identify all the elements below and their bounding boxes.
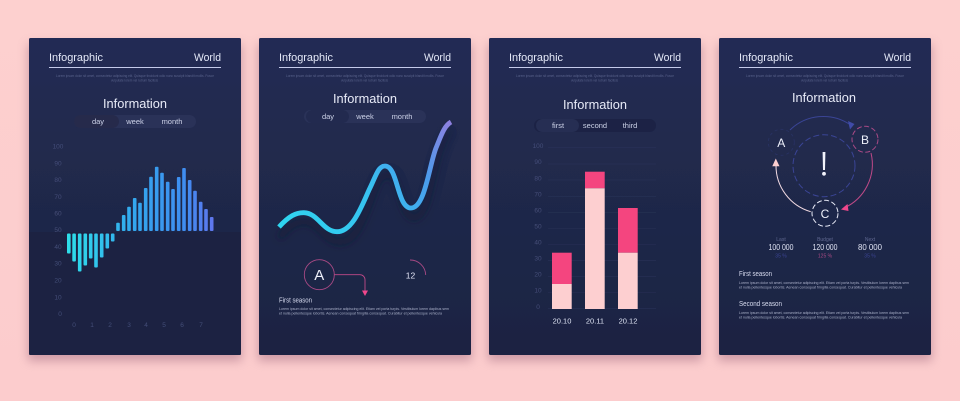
exclamation mark <box>822 152 826 176</box>
y axis: 70 <box>534 192 542 198</box>
y axis: 40 <box>54 244 62 251</box>
header: Infographic <box>279 52 333 64</box>
intro text: Lorem ipsum dolor sit amet, consectetur adipiscing elit. Quisque tincidunt odio nunc suscipit blandit mollis. Fusce <box>516 74 674 78</box>
cycle diagram <box>768 116 878 226</box>
first season text <box>739 271 909 290</box>
bar labels: 20.12 <box>619 316 637 326</box>
first season text: et nulla pellentesque lobortis. Aenean consequat fringilla consequat. Curabitur et pellentesque vehicula <box>739 286 902 290</box>
y axis: 20 <box>534 272 542 278</box>
header: Infographic <box>509 52 563 64</box>
callout A with arrow: A <box>314 267 324 284</box>
tabs: week <box>355 112 374 121</box>
y axis: 90 <box>54 160 62 168</box>
first season text: Lorem ipsum dolor sit amet, consectetur adipiscing elit. Etiam vel porta turpis. Vestibulum lorem dapibus sem <box>279 307 449 311</box>
intro text: vulputate lorem vel rutrum facilisis <box>111 78 158 82</box>
tabs: third <box>623 121 637 130</box>
panel 1: bar wave chart <box>29 38 241 355</box>
header: World <box>884 52 911 64</box>
header <box>509 52 681 68</box>
y axis: 10 <box>534 288 542 294</box>
first season text: First season <box>279 298 312 304</box>
tabs: day <box>92 117 104 126</box>
first season text: et nulla pellentesque lobortis. Aenean consequat fringilla consequat. Curabitur et pellentesque vehicula <box>279 312 442 316</box>
second season text <box>739 301 909 320</box>
y axis: 50 <box>54 227 62 234</box>
arrow A to B <box>790 116 854 130</box>
diverging bars <box>67 167 214 272</box>
x axis: 1 <box>90 322 94 329</box>
y axis: 0 <box>58 311 62 318</box>
y axis: 80 <box>534 176 542 182</box>
first season text: First season <box>739 271 772 278</box>
intro text: Lorem ipsum dolor sit amet, consectetur adipiscing elit. Quisque tincidunt odio nunc suscipit blandit mollis. Fusce <box>56 74 214 78</box>
grid lines <box>548 148 656 309</box>
y axis: 100 <box>53 144 64 150</box>
header <box>739 52 911 68</box>
x axis: 2 <box>108 322 112 329</box>
x axis: 5 <box>162 322 166 329</box>
bar 20.11 <box>585 172 605 309</box>
panel shadows <box>28 44 932 361</box>
intro text: vulputate lorem vel rutrum facilisis <box>801 78 848 82</box>
stat next: 35 % <box>864 254 876 260</box>
header: Infographic <box>49 52 103 64</box>
y axis: 30 <box>54 260 62 268</box>
intro text <box>56 74 214 82</box>
heading: Information <box>792 90 856 105</box>
x axis: 4 <box>144 322 148 329</box>
x axis <box>72 322 203 329</box>
tabs <box>534 119 656 132</box>
stat last <box>768 237 794 260</box>
B node: B <box>861 133 869 147</box>
header <box>49 52 221 68</box>
header: World <box>194 52 221 64</box>
arrow C to A <box>772 158 811 212</box>
first season text <box>279 298 449 316</box>
y axis: 100 <box>533 143 544 150</box>
stat last: Last <box>776 237 786 243</box>
x axis: 3 <box>127 322 131 329</box>
intro text: Lorem ipsum dolor sit amet, consectetur adipiscing elit. Quisque tincidunt odio nunc suscipit blandit mollis. Fusce <box>286 74 444 78</box>
tabs: month <box>392 112 412 121</box>
y axis: 20 <box>54 278 62 284</box>
stat last: 100 000 <box>768 243 794 252</box>
bar 20.10 <box>552 253 572 309</box>
y axis: 70 <box>54 194 62 201</box>
y axis: 60 <box>534 208 542 214</box>
x axis: 0 <box>72 322 76 329</box>
second season text: Second season <box>739 301 782 308</box>
callout A with arrow <box>304 260 368 296</box>
panel 3: stacked bar chart <box>489 38 701 355</box>
second season text: Lorem ipsum dolor sit amet, consectetur adipiscing elit. Etiam vel porta turpis. Vestibulum lorem dapibus sem <box>739 311 909 315</box>
y axis: 80 <box>54 177 62 184</box>
curve shadow <box>279 130 451 242</box>
arrow B to C <box>841 153 872 211</box>
intro text <box>286 74 444 82</box>
heading: Information <box>333 91 397 106</box>
bar labels <box>553 316 637 326</box>
A node: A <box>777 136 785 150</box>
x axis: 6 <box>180 322 184 329</box>
center dashed ring <box>793 135 855 197</box>
panel 2: curve chart <box>259 38 471 355</box>
tabs: first <box>552 121 565 130</box>
intro text: vulputate lorem vel rutrum facilisis <box>341 78 388 82</box>
tabs <box>74 115 196 128</box>
stat budget <box>812 237 838 260</box>
header: Infographic <box>739 52 793 64</box>
stat last: 35 % <box>775 254 787 260</box>
stats <box>768 237 883 260</box>
y axis: 10 <box>54 294 62 302</box>
bar labels: 20.10 <box>553 316 571 326</box>
first season text: Lorem ipsum dolor sit amet, consectetur adipiscing elit. Etiam vel porta turpis. Vestibulum lorem dapibus sem <box>739 281 909 285</box>
y axis <box>533 143 544 311</box>
tabs <box>304 110 426 123</box>
intro text <box>516 74 674 82</box>
dial 12 <box>406 260 426 280</box>
stat next <box>858 237 883 260</box>
panel 4: cycle diagram <box>719 38 931 355</box>
intro text <box>746 74 904 82</box>
intro text: Lorem ipsum dolor sit amet, consectetur adipiscing elit. Quisque tincidunt odio nunc suscipit blandit mollis. Fusce <box>746 74 904 78</box>
stat next: Next <box>865 237 876 243</box>
header <box>279 52 451 68</box>
header: World <box>424 52 451 64</box>
stat budget: 125 % <box>818 254 833 260</box>
y axis: 90 <box>534 159 542 166</box>
y axis: 30 <box>534 256 542 262</box>
header: World <box>654 52 681 64</box>
y axis: 40 <box>534 240 542 246</box>
tabs: week <box>125 117 144 126</box>
bar 20.12 <box>618 208 638 309</box>
tabs: day <box>322 112 334 121</box>
heading: Information <box>563 97 627 112</box>
bar labels: 20.11 <box>586 316 604 326</box>
dial 12: 12 <box>406 270 415 280</box>
heading: Information <box>103 96 167 111</box>
stat next: 80 000 <box>858 243 883 252</box>
stat budget: 120 000 <box>812 243 838 252</box>
y axis: 50 <box>534 224 542 230</box>
y axis: 0 <box>536 304 540 311</box>
x axis: 7 <box>199 322 203 329</box>
curve line <box>279 122 451 232</box>
second season text: et nulla pellentesque lobortis. Aenean consequat fringilla consequat. Curabitur et pellentesque vehicula <box>739 316 902 320</box>
y axis: 60 <box>54 210 62 218</box>
y axis <box>53 144 64 318</box>
stat budget: Budget <box>817 237 834 243</box>
C node: C <box>821 207 830 221</box>
tabs: second <box>583 121 607 130</box>
intro text: vulputate lorem vel rutrum facilisis <box>571 78 618 82</box>
tabs: month <box>162 117 182 126</box>
